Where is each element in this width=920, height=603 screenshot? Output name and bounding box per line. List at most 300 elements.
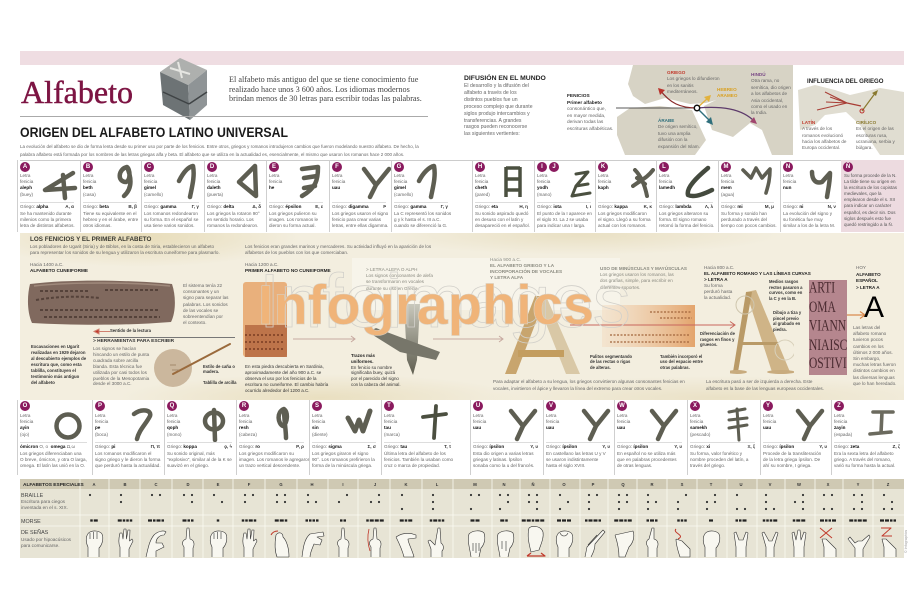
card K: actual con los romanos. [598, 223, 647, 228]
text: griego heading: Y LETRA ALFA [490, 275, 523, 280]
card I J: Letra [537, 173, 547, 178]
text: minúsculas: Los griegos usaron los romanos, las [600, 272, 674, 277]
card N [783, 160, 838, 232]
card P: Letra [95, 413, 105, 418]
label: medios rasgos: rectos pasaron a [769, 285, 803, 290]
text: trazos uniformes: con la cabeza del animal. [351, 382, 401, 387]
table header letters: Q [621, 482, 625, 487]
card Ñ: siglos después esto fue [844, 216, 891, 221]
section: fenicios heading: LOS FENICIOS Y EL PRIMER ALFABETO [30, 236, 151, 243]
labels: stylus and tablet: madera. [203, 369, 219, 374]
card U: Letra [473, 413, 483, 418]
card B: (casa) [83, 192, 96, 197]
card I J: (mano) [537, 192, 552, 197]
arrow: sentido de la lectura: Sentido de la lectura [110, 328, 151, 333]
card K: K [601, 164, 605, 170]
text: alfabeto cuneiforme [30, 262, 88, 273]
card U: Υ, υ [530, 444, 538, 448]
label: hebreo arameo: HEBREO [717, 87, 737, 92]
card U: fenicia [473, 419, 486, 424]
heading: herramientas: > HERRAMIENTAS PARA ESCRIBIR [93, 339, 174, 344]
glyph resh [236, 400, 306, 444]
card Ñ: Su forma procede de la N. [844, 173, 897, 178]
card B [83, 160, 139, 232]
card Q: Q [170, 403, 174, 409]
label: hebreo arameo: ARAMEO [717, 93, 737, 98]
text: sistema: el contexto. [183, 320, 206, 325]
card W: Υ, υ [674, 444, 682, 448]
card D: Letra [207, 173, 217, 178]
text: letras alfabeto romano: que lo han heredado. [853, 381, 896, 386]
table header letters: J [374, 482, 377, 487]
table: alfabetos especiales [0, 475, 920, 565]
glyph zayin [831, 400, 901, 444]
card Y: Y [766, 403, 770, 409]
card R [239, 400, 306, 475]
glyph uau [543, 400, 613, 444]
card X: fenicia [690, 419, 703, 424]
card Q: suavizó en el griego. [167, 463, 209, 468]
card B: Letra [83, 173, 93, 178]
label: latín: hacia los alfabetos de [802, 139, 846, 144]
card S: (diente) [312, 432, 328, 437]
label: medios rasgos: Medios rasgos [769, 279, 798, 284]
label: cirílico: ucraniana, serbia y [856, 139, 895, 144]
label: árabe: difusión con la [658, 137, 687, 142]
map: world diffusion [616, 65, 793, 155]
card Ñ: español, es decir sin. Dos [844, 210, 896, 215]
heading: difusión: DIFUSIÓN EN EL MUNDO [464, 75, 546, 82]
card I J: Griego: iota [537, 204, 562, 208]
card A: Griego: alpha [20, 204, 48, 208]
sign language hands [86, 526, 896, 557]
title: Alfabeto [21, 74, 133, 110]
card S: 90°. Los romanos prefirieron la [312, 457, 375, 462]
table header letters: R [650, 482, 654, 487]
table row labels: para comunicarse. [21, 543, 60, 548]
card W: fenicia [617, 419, 630, 424]
text: griego heading: Hacia 900 a.C. [490, 257, 521, 262]
label: cirílico [856, 120, 895, 150]
text: piedra sardinia: observa el uso por los fenicios de la [245, 376, 317, 381]
text: escritura izquierda: alfabeto es la base de las lenguas europeas occidentales. [706, 386, 824, 391]
text: minúsculas: USO DE MINÚSCULAS Y MAYÚSCULAS [600, 266, 687, 271]
card M: Su forma y sonido han [721, 211, 767, 216]
card L [659, 160, 715, 232]
card X: Griego: xi [690, 444, 710, 448]
card N: nun [783, 185, 791, 190]
credit: © Infographics [904, 530, 908, 553]
image: roman inscription: VIANN [809, 318, 846, 335]
text: letras alfabeto romano: tuvieron pocos [853, 337, 883, 342]
card Y: uau [763, 425, 771, 430]
card E: he [269, 185, 274, 190]
text: herramientas: hincando un estilo de punta [93, 352, 149, 357]
card Y: de la letra griega ípsilon. De [763, 457, 820, 462]
glyph beth [118, 164, 133, 198]
card M: Μ, μ [765, 204, 774, 208]
card Q: fenicia [167, 419, 180, 424]
text: sistema: sobreentendían por [183, 314, 223, 319]
card Ñ: emplearon desde el s. XII [844, 197, 895, 202]
glyph: large aleph [362, 300, 446, 378]
label: árabe [658, 118, 700, 149]
card B: otros idiomas. [83, 223, 112, 228]
text: adaptar [493, 379, 685, 393]
card R: Letra [239, 413, 249, 418]
card F: F [335, 164, 339, 170]
text: excavaciones [31, 344, 86, 385]
card V: Υ, υ [602, 444, 610, 448]
card C: gimel [144, 185, 156, 190]
card F: fenicia [332, 179, 345, 184]
card P: (boca) [95, 432, 108, 437]
label: hebreo arameo [717, 87, 738, 98]
card V [546, 400, 612, 475]
card U: Esta dio origen a varias letras [473, 451, 534, 456]
label: latín: A través de los [802, 126, 832, 131]
card C: (camello) [144, 192, 163, 197]
text: excavaciones: Excavaciones en Ugarit [31, 344, 79, 349]
label: medios rasgos: curvos, como en [769, 290, 802, 295]
text: excavaciones: tablilla, constituyen el [31, 368, 76, 373]
card N: Ν, ν [828, 204, 836, 208]
glyph cheth [504, 166, 522, 197]
text: alfabeto romano: Hacia 800 a.C. [704, 265, 734, 270]
card T: Última letra del alfabeto de los [384, 451, 446, 456]
card X: Ξ, ξ [747, 444, 755, 448]
label: griego: mediterráneos. [667, 89, 698, 94]
label: árabe: tuvo una amplia [658, 131, 690, 136]
card L: fenicia [659, 179, 672, 184]
label: palitos [590, 354, 632, 370]
card Ñ: La tilde tiene su origen en [844, 179, 896, 184]
card H: en desuso con el latín y [475, 217, 523, 222]
card O [20, 400, 89, 475]
card O: ayin [20, 425, 29, 430]
intro text: brindan menos de 30 letras para escribir todas las palabras. [229, 94, 422, 103]
card Y: Letra [763, 413, 773, 418]
card A: A [23, 164, 27, 170]
card R: Los griegos modificaron su [239, 451, 294, 456]
label: hindú [751, 72, 791, 115]
card D: Δ, δ [252, 204, 261, 208]
text: excavaciones: al descubierto ejemplos de [31, 356, 86, 361]
card W: En español no se utiliza más [617, 451, 675, 456]
table header letters: D [186, 482, 190, 487]
card L: Griego: lambda [659, 204, 691, 208]
card O: (ojo) [20, 432, 29, 437]
label: hindú: como el usado en [751, 104, 787, 109]
card U: U [476, 403, 480, 409]
card X: Letra [690, 413, 700, 418]
card A: Se ha mantenido durante [20, 211, 72, 216]
card C: Letra [144, 173, 154, 178]
table row labels: Escritura para ciegos [21, 499, 66, 504]
table header letters: N [502, 482, 506, 487]
card F: Ϝ [383, 204, 386, 208]
text: adaptar: vocales, invirtieron el ápice y llevaron la línea del extremo para crear otros vocales. [493, 386, 662, 391]
text: sistema: consonantes y un [183, 289, 219, 294]
text: fenicios marinos: alfabetos de los pueblos con los que comerciaban. [245, 250, 348, 255]
text: difusión: siglos produjo intercambios y [464, 111, 530, 117]
card G: Griego: gamma [394, 204, 426, 208]
card G: La C representó los sonidos [394, 211, 451, 216]
label: cirílico: búlgara. [856, 145, 873, 150]
table header letters: C [154, 482, 158, 487]
card H: Η, η [519, 204, 528, 208]
text: fenicios: Primer alfabeto [567, 101, 602, 106]
card P: Π, π [151, 444, 160, 448]
card D: daleth [207, 185, 221, 190]
text: herramientas: desde el 3000 a.C. [93, 381, 132, 386]
text: difusión: las siguientes vertientes: [464, 131, 520, 137]
text: herramientas: cuadrada sobre arcilla [93, 358, 138, 363]
card D: (puerta) [207, 192, 223, 197]
card Z: Letra [834, 413, 844, 418]
card I J: El punto de la I aparece en [537, 211, 592, 216]
card A: Letra [20, 173, 30, 178]
text: piedra sardinia: ocurrido alrededor del 1200 a.C. [245, 388, 310, 393]
card A: milenios como la primera [20, 217, 71, 222]
table header letters: T [710, 482, 713, 487]
panel: parchment history [20, 233, 904, 400]
card H: (pared) [475, 192, 490, 197]
text: letras alfabeto romano: Las letras del [853, 325, 880, 330]
card Z: griego. A través del romano, [834, 457, 891, 462]
card A [20, 160, 76, 232]
card V: Letra [546, 413, 556, 418]
label: diferenciación: rasgos en finos y [700, 337, 734, 342]
card T: tau [384, 425, 391, 430]
card T: cruz o marca de propiedad. [384, 463, 440, 468]
card E: dieron su forma actual. [269, 223, 316, 228]
card P: fenicia [95, 419, 108, 424]
card Z: fenicia [834, 419, 847, 424]
text: trazos uniformes: significaba buey, quizá [351, 370, 395, 375]
card S [312, 400, 378, 475]
card C: C [147, 164, 151, 170]
card T: Τ, τ [444, 444, 451, 448]
card K: kaph [598, 185, 609, 190]
card F [332, 160, 388, 232]
label: árabe: ÁRABE [658, 118, 674, 123]
arrow: to greek A [433, 334, 505, 344]
card R: (cabeza) [239, 432, 257, 437]
card A: aleph [20, 185, 32, 190]
text: letras alfabeto romano: alfabeto romano [853, 331, 886, 336]
text: letras alfabeto romano: muchas letras fueron [853, 362, 896, 367]
table row labels [21, 482, 84, 548]
card I J: para indicar una I larga. [537, 223, 585, 228]
text: griego heading: INCORPORACIÓN DE VOCALES [490, 269, 562, 274]
image: carved stone [241, 280, 291, 360]
glyph: greek A [503, 292, 583, 376]
card O: O [23, 403, 27, 409]
card W: Letra [617, 413, 627, 418]
text: letra alefa: Los signos consonantes de alefa [366, 273, 433, 278]
card X: nombre proceden del latín, a [690, 457, 748, 462]
card L: Los griegos alteraron su [659, 211, 708, 216]
card B: Griego: beta [83, 204, 109, 208]
card R: Ρ, ρ [296, 444, 304, 448]
table row labels: DE SEÑAS [21, 529, 49, 536]
label: griego: GRIEGO [667, 70, 685, 75]
pink top band [20, 51, 904, 65]
card H [475, 160, 530, 232]
morse code [90, 519, 896, 522]
text: trazos uniformes: Trazos más [351, 353, 375, 358]
map: europe [798, 85, 904, 155]
glyph ayin [20, 400, 90, 444]
card A: letra de distintos alfabetos. [20, 223, 75, 228]
label: hindú: la India. [751, 110, 767, 115]
text: escritura izquierda [706, 379, 824, 393]
card U: sonaba como la u del francés. [473, 463, 534, 468]
text: hoy [856, 265, 881, 291]
card G: Γ, γ [441, 204, 448, 208]
image: roman inscription: OSTIVI [809, 356, 847, 372]
image: cuneiform tablet [28, 280, 175, 325]
label: hindú: Otra rama, no [751, 78, 779, 83]
glyph kaph [631, 168, 655, 198]
card U: griegas y latinas. Ípsilon [473, 457, 522, 462]
card G: g y k hasta el s. III a.C. [394, 217, 441, 222]
text: fenicios marinos: Los fenicios eran grandes marinos y mercaderes. Su actividad influyó en la aparición de los [245, 244, 431, 249]
card Y: Υ, υ [819, 444, 827, 448]
card K: Los griegos modificaron [598, 211, 647, 216]
card E: E [272, 164, 276, 170]
label: diferenciación [700, 331, 735, 348]
label: griego: en los sanitis [667, 83, 694, 88]
card Q: Su sonido original, más [167, 451, 215, 456]
card N: similar a los de la letra M. [783, 223, 835, 228]
label: hindú: a los alfabetos de [751, 91, 787, 96]
card H: H [478, 164, 482, 170]
card N: La evolución del signo y [783, 211, 832, 216]
card C: usa tiene varios sonidos. [144, 223, 195, 228]
text: letra alefa: durante su uso en Grecia. [366, 286, 419, 291]
glyph aleph [42, 170, 78, 200]
glyph samekh [687, 400, 757, 444]
labels: stylus and tablet [203, 364, 236, 385]
card D: en sentido horario. Los [207, 217, 254, 222]
card R: resh [239, 425, 249, 430]
text: fenicios intro: Los pobladores de Ugarit (Siria) y de Biblos, en la costa de Siria, establecieron un alfabeto [30, 244, 214, 249]
glyph lamedh [686, 166, 714, 198]
label: también: uso del espacio entre [660, 359, 703, 364]
label: dibujo: piedra. [773, 327, 787, 332]
card V: En castellano las letras U y V [546, 451, 606, 456]
card V: hasta el siglo XVIII. [546, 463, 585, 468]
text: minúsculas: dos grafías, simple, para escribir en [600, 278, 673, 283]
card L: L [662, 164, 666, 170]
text: difusión: distintos pueblos fue un [464, 97, 518, 103]
arrow: to alpha [293, 334, 357, 344]
text: excavaciones: realizadas en 1929 dejaron [31, 350, 85, 355]
card K: Letra [598, 173, 608, 178]
card B: hebreo y en el árabe, entre [83, 217, 138, 222]
text: sistema: signo para separar las [183, 295, 228, 300]
text: letra alefa [366, 267, 433, 292]
text: hoy: HOY [856, 265, 866, 270]
card X: X [693, 403, 697, 409]
card X: Su forma, valor fonético y [690, 451, 742, 456]
text: fenicios: escrituras alfabéticas. [567, 127, 613, 132]
card R: Griego: ro [239, 444, 260, 448]
label: medios rasgos [769, 279, 803, 301]
text: letras alfabeto romano: las diversas lenguas [853, 375, 895, 380]
table header letters: I [342, 482, 344, 487]
card Ñ: la escritura de los copistas [844, 185, 897, 190]
card X [690, 400, 757, 475]
label: cirílico: CIRÍLICO [856, 120, 876, 125]
card O: Letra [20, 413, 30, 418]
whitish panel behind Greek section [352, 258, 620, 310]
text: alfabeto romano: la actualidad. [704, 295, 731, 300]
intro text [229, 75, 422, 103]
label: árabe: expansión del Islam. [658, 144, 700, 149]
description text: palabra alfabeto está formada por los nombres de las letras griegas alfa y beta. El alfabeto que se utiliza en la actualidad es, esencialmente, el mismo que usaron los romanos hace 2 000 años. [20, 152, 404, 157]
card V: uau [546, 425, 554, 430]
card F: Letra [332, 173, 342, 178]
card W: Griego: ípsilon [617, 444, 648, 448]
card U: Griego: ípsilon [473, 444, 504, 448]
text: piedra sardinia: En esta piedra descubierta en Sardinia, [245, 364, 324, 369]
letter: modern A: A [864, 291, 884, 324]
panel: difusión en el mundo [464, 74, 546, 137]
label: latín: LATÍN [802, 120, 815, 125]
card T: Letra [384, 413, 394, 418]
table header letters: M [473, 482, 477, 487]
text: letra alefa: se transformaron en vocales [366, 279, 424, 284]
card K [598, 160, 654, 232]
table row labels: ALFABETOS ESPECIALES [23, 482, 84, 488]
card T: T [387, 403, 391, 409]
card T: fenicia [384, 419, 397, 424]
text: alfabeto cuneiforme: Hacia 1400 a.C. [30, 262, 64, 267]
label: diferenciación: Diferenciación de [700, 331, 735, 336]
text: escritura izquierda: La escritura pasó a ser de izquierda a derecha. Este [706, 379, 812, 384]
text: alfabeto romano: EL ALFABETO ROMANO Y LAS LÍNEAS CURVAS [704, 271, 811, 276]
text: hoy: > LETRA A [856, 284, 880, 290]
heading: influencia: INFLUENCIA DEL GRIEGO [807, 78, 884, 85]
table header letters: F [248, 482, 251, 487]
card G: Letra [394, 173, 404, 178]
text: letras alfabeto romano: cambios en los [853, 344, 884, 349]
label: también [660, 354, 703, 370]
card Z: zayin [834, 425, 846, 430]
card V: Griego: ípsilon [546, 444, 577, 448]
text: difusión [464, 83, 533, 137]
card C [144, 160, 201, 232]
text: alfabeto cuneiforme: ALFABETO CUNEIFORME [30, 268, 88, 273]
table header letters: W [797, 482, 801, 487]
labels: stylus and tablet: Tablilla de arcilla [203, 380, 236, 385]
card Y: ahí su nombre, I griega. [763, 463, 812, 468]
card P: P [98, 403, 102, 409]
card I J: Ι, ι [586, 204, 591, 208]
text: alfabeto no cuneiforme: PRIMER ALFABETO NO CUNEIFORME [245, 268, 331, 273]
text: sistema: palabras. Los sonidos [183, 302, 228, 307]
card A: (buey) [20, 192, 33, 197]
arrow: red to roman A [570, 320, 738, 330]
card F: letras, entre ellas digamma. [332, 223, 388, 228]
card O: Los griegos diferenciaban una [20, 451, 82, 456]
table header letters: G [279, 482, 283, 487]
text: difusión: transferencias. A grandes [464, 118, 521, 124]
glyph uau [362, 166, 391, 200]
